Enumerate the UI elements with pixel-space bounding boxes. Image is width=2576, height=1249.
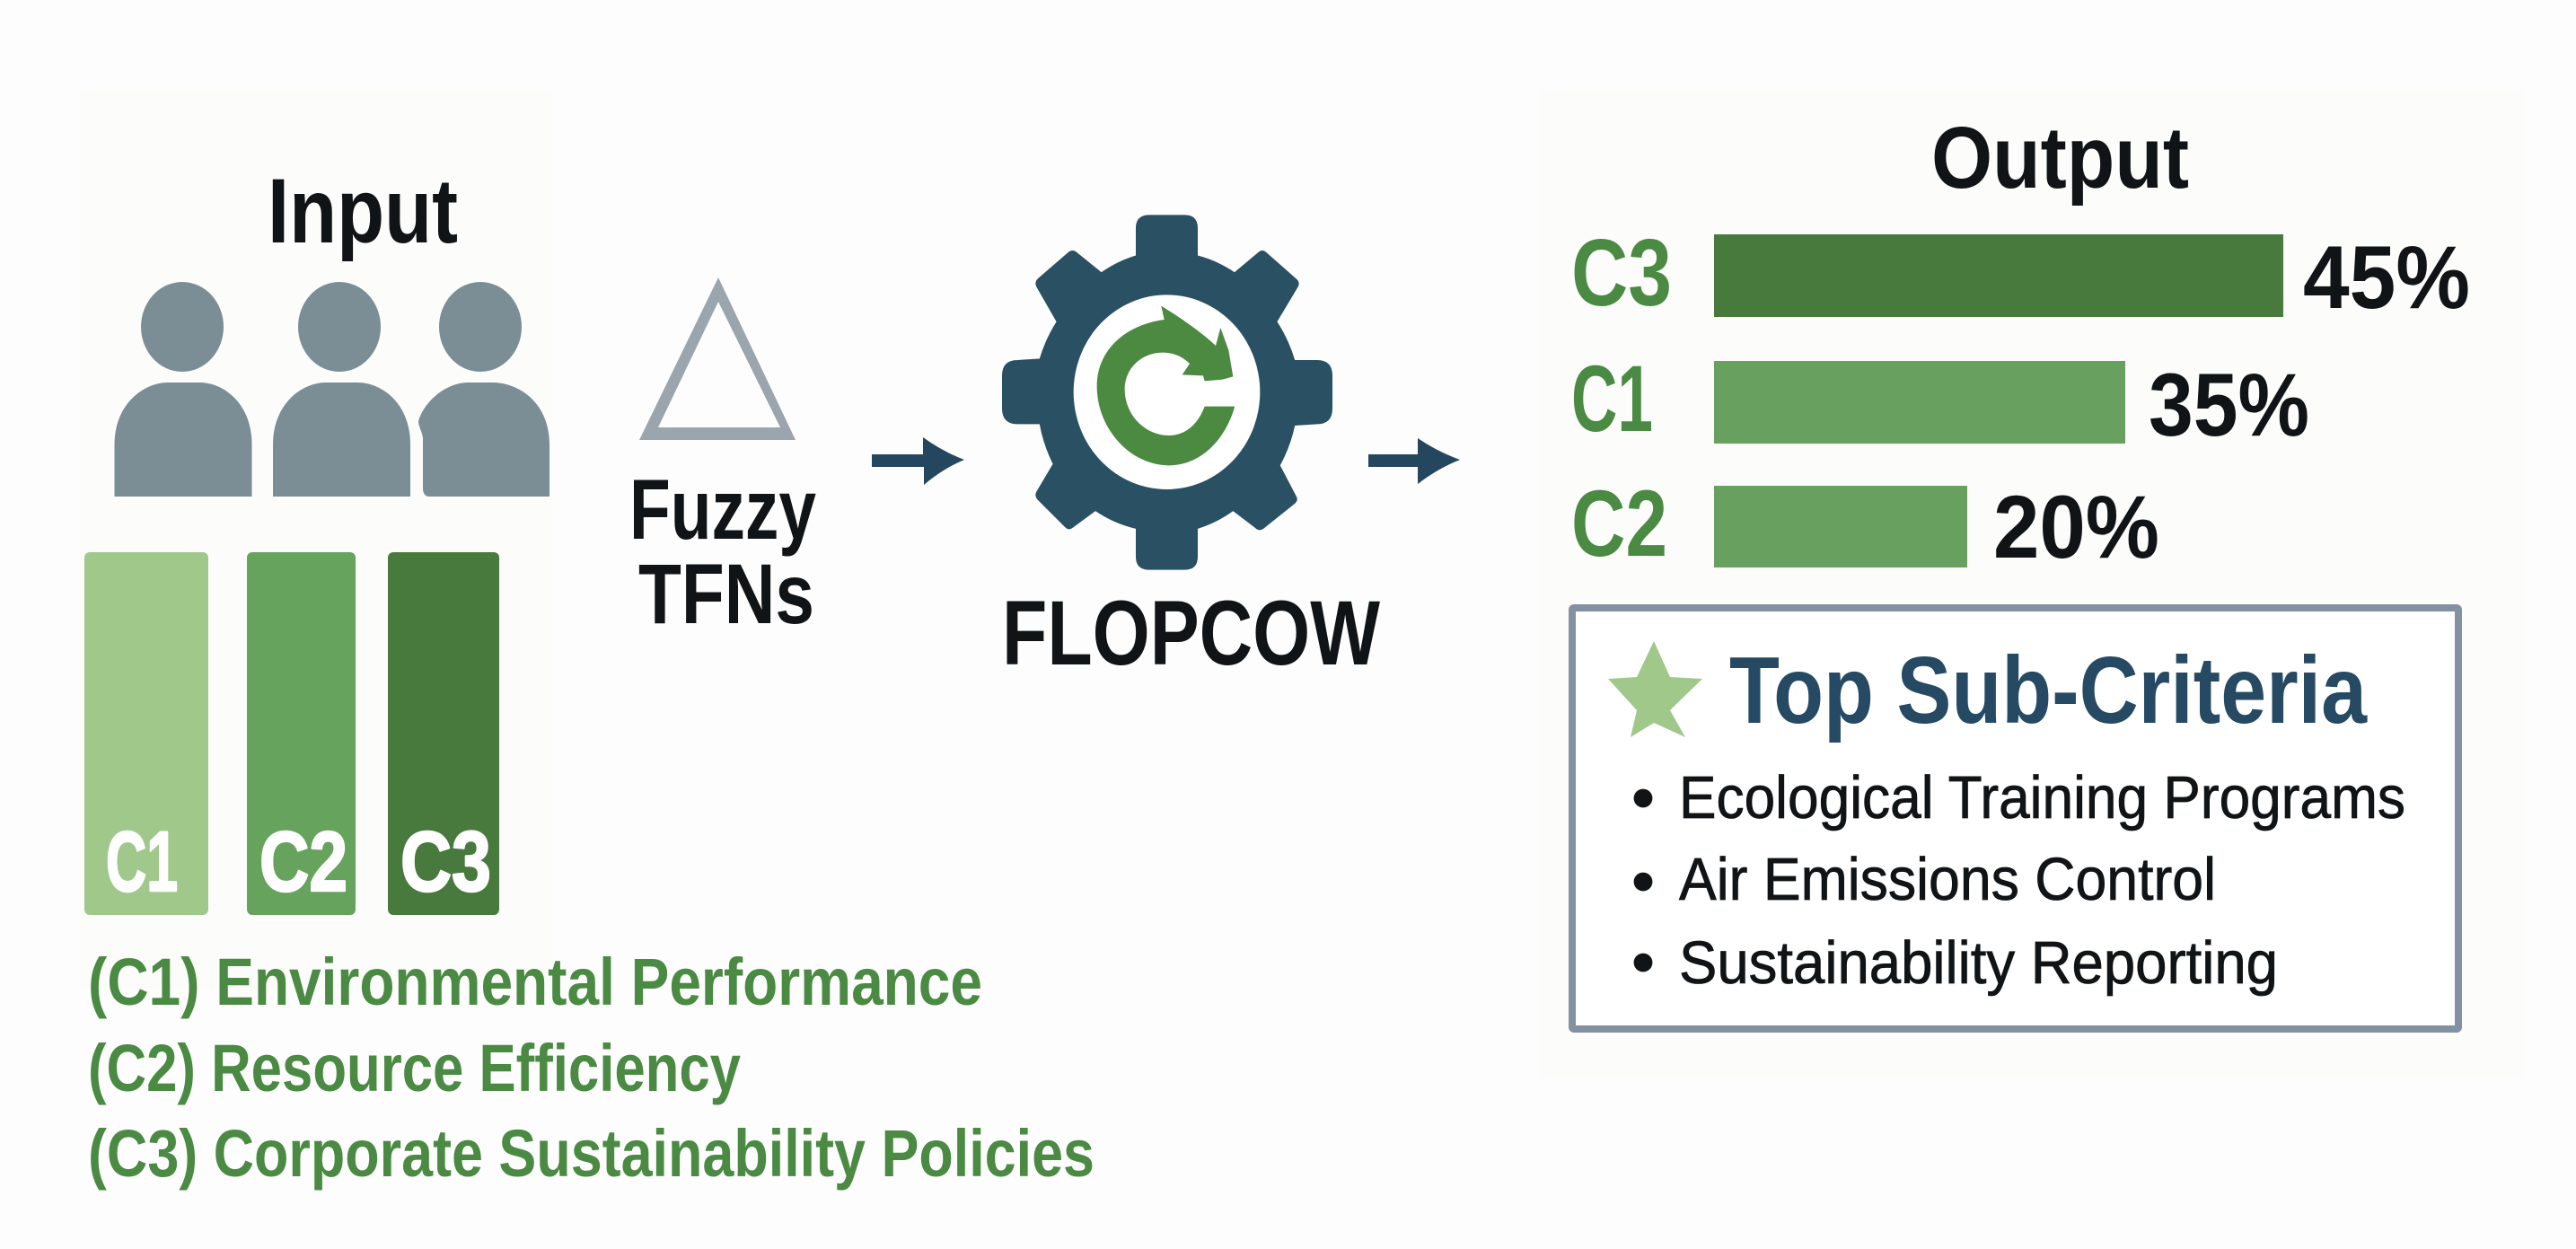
bar: C3 criterion (388, 552, 499, 915)
bar: C2 criterion (247, 552, 356, 915)
list: sub-criteria: Air Emissions Control (1679, 846, 2216, 913)
list: sub-criteria (1634, 764, 2405, 997)
heading: top sub-criteria: Top Sub-Criteria (1729, 638, 2368, 743)
row: C1 35%: C1 (1571, 347, 1653, 452)
legend: criteria names: (C3) Corporate Sustainability Policies (88, 1116, 1095, 1191)
panel: input (79, 90, 553, 988)
icon: fuzzy triangle (639, 277, 796, 440)
panel: top sub-criteria (1572, 608, 2458, 1029)
legend: criteria names: (C2) Resource Efficiency (88, 1031, 741, 1105)
list: sub-criteria: Sustainability Reporting (1679, 929, 2278, 997)
bar chart: criteria weights (1571, 220, 2470, 576)
row: C3 45%: 45% (2303, 227, 2470, 327)
icon: group of three people (115, 282, 549, 497)
label: fuzzy TFNs: TFNs (638, 547, 814, 642)
arrow: FLOPCOW to output (1368, 438, 1460, 484)
row: C2 20%: 20% (1993, 477, 2159, 576)
label: FLOPCOW: FLOPCOW (1002, 582, 1381, 684)
heading: output: Output (1931, 109, 2189, 207)
legend: criteria names (88, 945, 1095, 1191)
label: fuzzy TFNs: Fuzzy (629, 462, 816, 558)
icon: FLOPCOW gear (1003, 215, 1332, 569)
bar: C1 criterion (84, 552, 208, 915)
row: C2 20% (1571, 471, 2159, 576)
label: fuzzy TFNs (629, 462, 816, 642)
bar: C3 criterion: C3 (400, 814, 491, 910)
bar: C1 criterion: C1 (106, 814, 178, 910)
row: C3 45% (1571, 220, 2470, 327)
bar: C2 criterion: C2 (259, 814, 347, 910)
row: C1 35%: 35% (2149, 355, 2309, 454)
panel: output (1540, 90, 2523, 1077)
row: C3 45%: C3 (1571, 220, 1672, 326)
heading: input: Input (268, 160, 458, 262)
arrow: input to FLOPCOW (872, 437, 964, 485)
row: C1 35% (1571, 347, 2309, 454)
icon: green cycle arrow (1097, 306, 1235, 465)
list: sub-criteria: Ecological Training Programs (1679, 764, 2405, 831)
icon: star (1608, 641, 1702, 737)
row: C2 20%: C2 (1571, 471, 1667, 576)
legend: criteria names: (C1) Environmental Performance (88, 945, 982, 1019)
